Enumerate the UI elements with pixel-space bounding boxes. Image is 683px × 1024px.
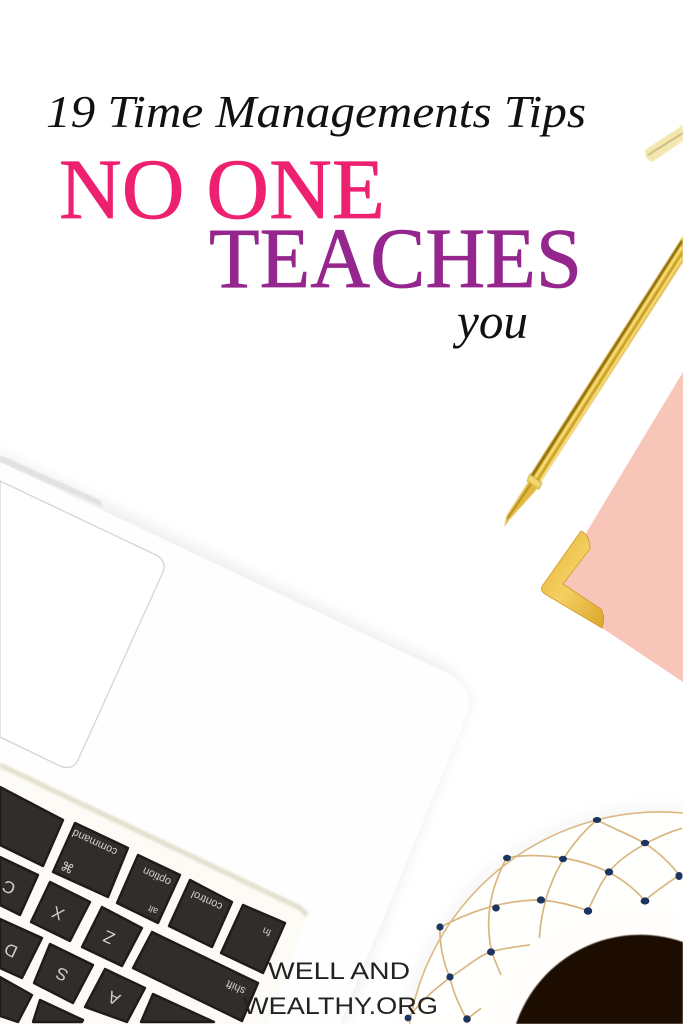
key labels: shift [224, 977, 248, 997]
keyboard well [0, 762, 308, 1024]
heading: NO ONE: NO ONE [59, 141, 385, 237]
key labels: command [71, 826, 119, 858]
brand: Well and Wealthy.org: WELL AND [268, 958, 410, 985]
key labels: S [53, 963, 71, 985]
notebook: pink folder [541, 372, 683, 682]
key labels [0, 826, 273, 1009]
gold corner [541, 531, 604, 628]
laptop hinge highlight [0, 455, 103, 507]
key labels: A [104, 987, 123, 1009]
saucer and coffee cup [401, 804, 683, 1024]
key labels: Z [100, 926, 118, 948]
key labels: option [141, 864, 173, 888]
title: 19 Time Managements Tips: 19 Time Managements Tips [46, 86, 586, 137]
key labels: control [189, 888, 225, 912]
cup [484, 904, 683, 1024]
saucer lattice [408, 820, 682, 1019]
coffee [516, 935, 683, 1024]
brand: Well and Wealthy.org: WEALTHY.ORG [243, 993, 438, 1020]
keyboard keys [0, 787, 285, 1022]
saucer dots [405, 817, 683, 1023]
gold pen [504, 236, 683, 527]
keyboard edge [0, 765, 307, 915]
key labels: X [49, 902, 67, 924]
brand: Well and Wealthy.org [243, 958, 438, 1020]
pen cap [645, 125, 683, 162]
key labels: D [1, 939, 21, 961]
key labels: alt [146, 903, 159, 917]
key labels: ⌘ [59, 856, 77, 876]
key labels: fn [261, 924, 273, 938]
subheading: you: you [452, 293, 528, 349]
laptop [0, 452, 472, 1024]
heading: TEACHES: TEACHES [209, 210, 582, 306]
trackpad [0, 481, 164, 768]
